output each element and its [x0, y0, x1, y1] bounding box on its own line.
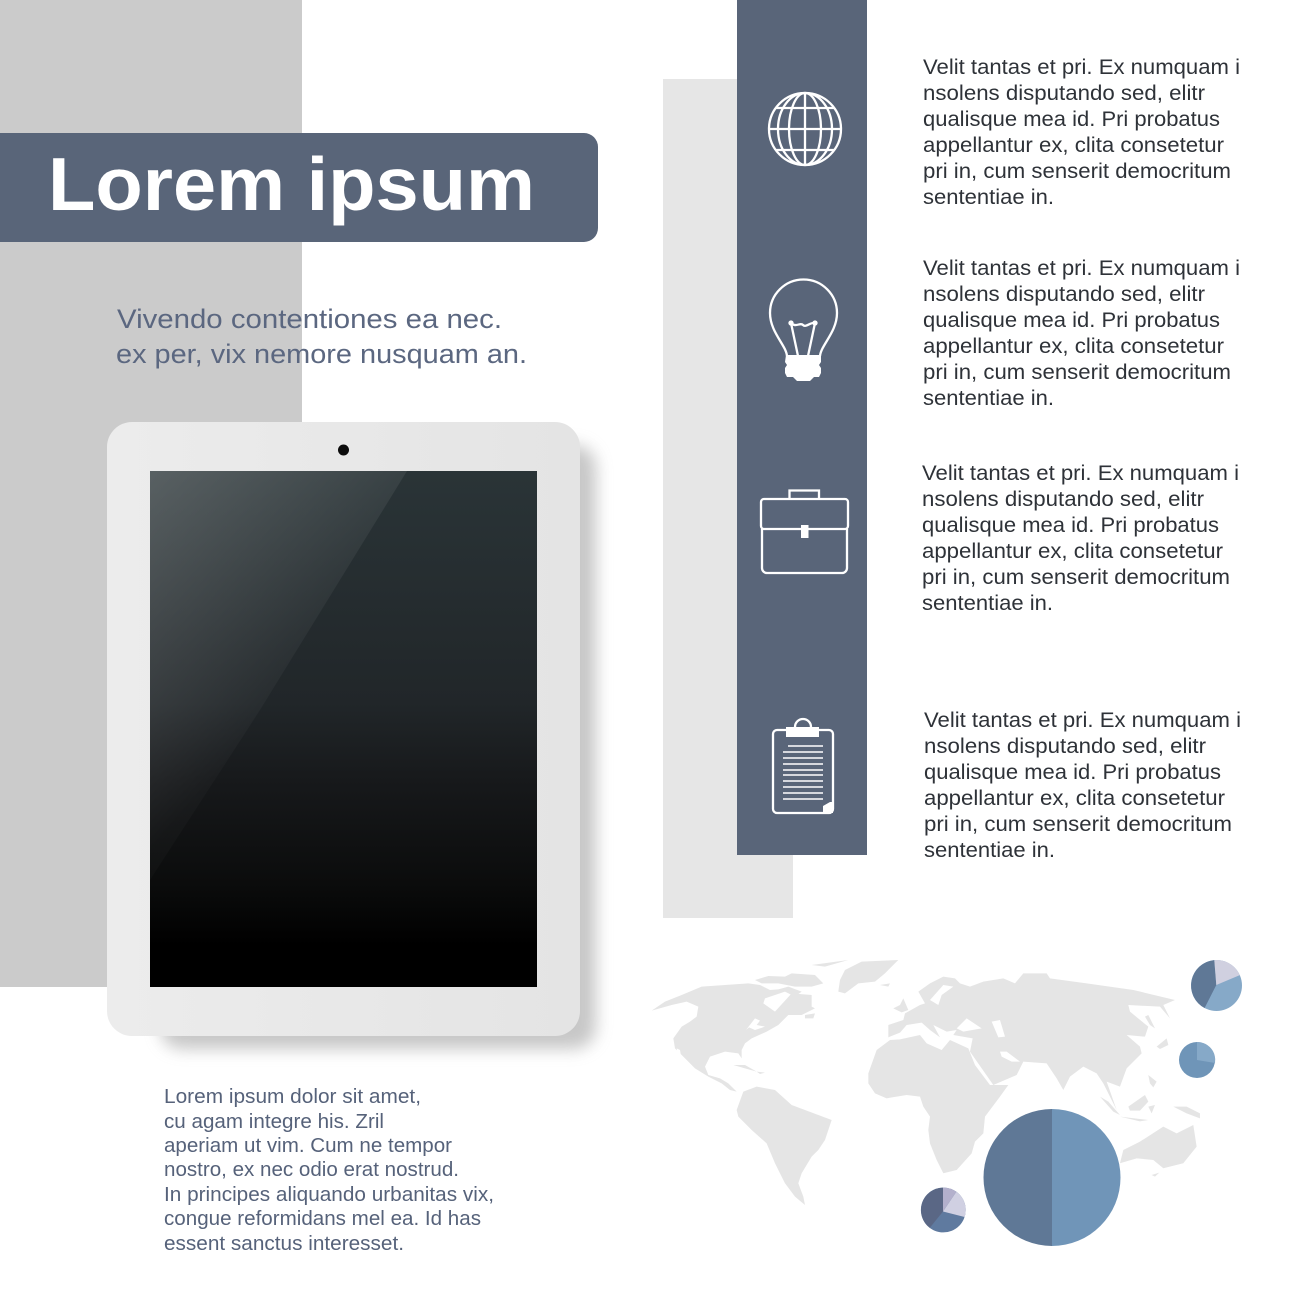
text block 3: pri in, cum senserit democritum [922, 566, 1230, 589]
subtitle text: ex per, vix nemore nusquam an. [116, 339, 527, 369]
text block 3: qualisque mea id. Pri probatus [922, 514, 1219, 537]
body text: lower left: nostro, ex nec odio erat nostrud. [164, 1159, 459, 1181]
body text: lower left: cu agam integre his. Zril [164, 1111, 384, 1133]
body text: lower left: aperiam ut vim. Cum ne tempor [164, 1135, 452, 1157]
text block 1: appellantur ex, clita consetetur [923, 134, 1224, 157]
icon: clipboard [773, 719, 833, 813]
panel: blue icon column [737, 0, 867, 855]
text block 4: nsolens disputando sed, elitr [924, 735, 1206, 758]
text block 3: sententiae in. [922, 592, 1053, 615]
panel: light gray column [663, 79, 793, 918]
body text: lower left: essent sanctus interesset. [164, 1233, 404, 1255]
subtitle text: Vivendo contentiones ea nec. [117, 304, 502, 334]
title banner: Lorem ipsum [48, 142, 535, 226]
text block 2: pri in, cum senserit democritum [923, 361, 1231, 384]
world map [652, 960, 1200, 1205]
subtitle text [116, 304, 527, 369]
body text: lower left: Lorem ipsum dolor sit amet, [164, 1086, 421, 1108]
text block 2: Velit tantas et pri. Ex numquam i [923, 257, 1240, 280]
text block 3: Velit tantas et pri. Ex numquam i [922, 462, 1239, 485]
icon: briefcase [761, 490, 848, 573]
text block 1: pri in, cum senserit democritum [923, 160, 1231, 183]
text block 2: sententiae in. [923, 387, 1054, 410]
text block 3 [922, 462, 1239, 615]
tablet device [107, 422, 596, 1049]
text block 1: sententiae in. [923, 186, 1054, 209]
text block 1: Velit tantas et pri. Ex numquam i [923, 56, 1240, 79]
text block 4 [924, 709, 1241, 862]
text block 4: qualisque mea id. Pri probatus [924, 761, 1221, 784]
pie chart: large [984, 1109, 1120, 1246]
text block 4: sententiae in. [924, 839, 1055, 862]
panel: left gray background [0, 0, 302, 987]
icon: globe [769, 93, 841, 165]
text block 3: appellantur ex, clita consetetur [922, 540, 1223, 563]
text block 2: qualisque mea id. Pri probatus [923, 309, 1220, 332]
text block 2: nsolens disputando sed, elitr [923, 283, 1205, 306]
text block 3: nsolens disputando sed, elitr [922, 488, 1204, 511]
body text: lower left: In principes aliquando urbanitas vix, [164, 1184, 494, 1206]
body text: lower left [164, 1086, 494, 1255]
body text: lower left: congue reformidans mel ea. Id has [164, 1208, 481, 1230]
pie chart: top right [1191, 960, 1242, 1011]
text block 1: qualisque mea id. Pri probatus [923, 108, 1220, 131]
text block 1 [923, 56, 1240, 209]
icon: light bulb [770, 280, 837, 381]
text block 4: pri in, cum senserit democritum [924, 813, 1232, 836]
text block 4: Velit tantas et pri. Ex numquam i [924, 709, 1241, 732]
text block 1: nsolens disputando sed, elitr [923, 82, 1205, 105]
title banner [0, 133, 598, 242]
pie chart: bottom [921, 1188, 966, 1232]
pie chart: middle right [1179, 1042, 1215, 1078]
text block 2: appellantur ex, clita consetetur [923, 335, 1224, 358]
text block 4: appellantur ex, clita consetetur [924, 787, 1225, 810]
text block 2 [923, 257, 1240, 410]
